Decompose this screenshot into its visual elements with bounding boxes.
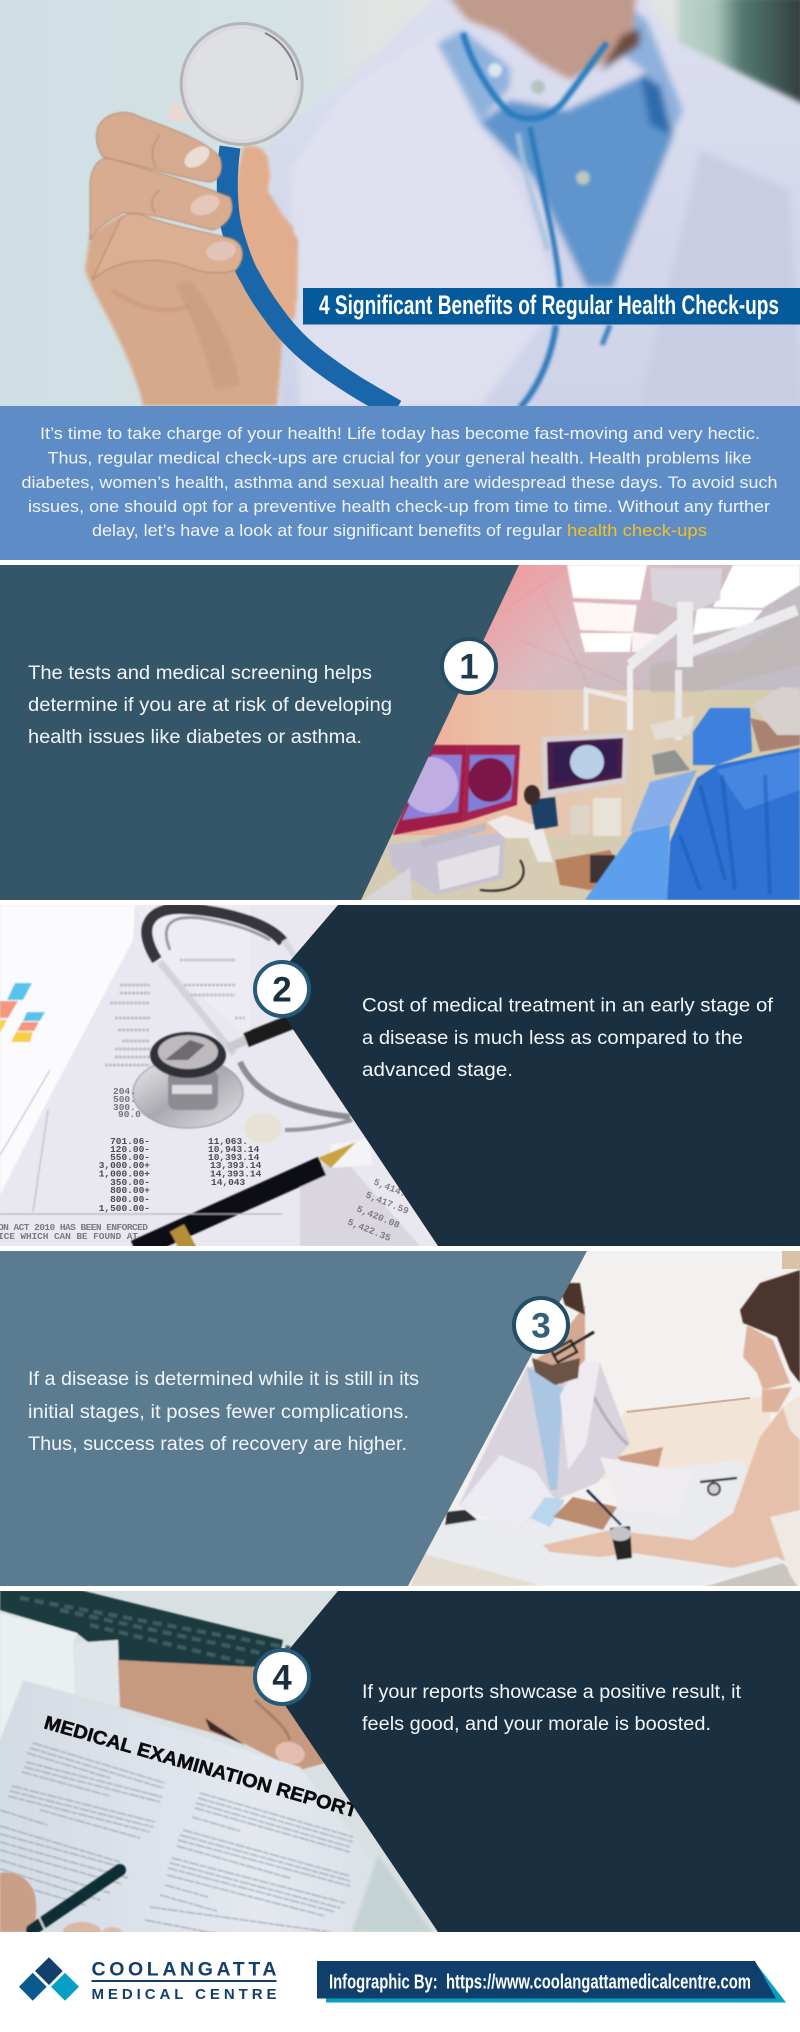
number badge 3: 3 [531,1306,551,1346]
ledger figures: 204. [113,1086,136,1097]
ledger figures: 120.00- [110,1144,150,1155]
intro text: Thus, regular medical check-ups are crucial for your general health. Health problems like [48,448,752,468]
benefit text 3: If a disease is determined while it is still in its [28,1369,419,1390]
ledger figures: 701.06- [110,1136,150,1147]
icon: stethoscope tube [227,147,396,410]
footer banner: infographic credit [317,1961,786,2002]
logo wordmark: COOLANGATTA [92,1958,276,1980]
intro text: diabetes, women’s health, asthma and sexual health are widespread these days. To avoid such [22,473,778,492]
number badge 3 [514,1298,568,1352]
ledger figures: 1,000.00+ [99,1168,150,1180]
intro text: health check-ups [567,521,707,540]
footer logo: Coolangatta Medical Centre: MEDICAL CENTRE [92,1986,276,2003]
footer logo: Coolangatta Medical Centre [19,1957,276,2003]
benefit text 2: a disease is much less as compared to the [362,1028,743,1049]
panel 2: cost of treatment [0,905,800,1252]
ledger figures: ON ACT 2010 HAS BEEN ENFORCED [0,1222,148,1233]
ledger figures: 5,420.08 [355,1204,402,1231]
panel 3: early detection [0,1251,800,1590]
benefit text 2: Cost of medical treatment in an early stage of [362,996,774,1016]
ledger figures: 11,063. [208,1136,248,1147]
panel 1: medical screening [0,565,800,900]
number badge 2 [255,962,309,1016]
benefit text 3: initial stages, it poses fewer complications. [28,1402,409,1423]
number badge 1: 1 [459,648,479,686]
ledger figures: 10,393.14 [208,1152,260,1163]
ledger figures: 3,000.00+ [99,1160,150,1171]
ledger figures: 800.00+ [110,1185,150,1196]
intro text: It’s time to take charge of your health! Life today has become fast-moving and very hectic. [40,424,760,443]
photo: doctor consulting with patient [400,1251,800,1590]
text panel shape [266,1591,800,1932]
benefit text 1: health issues like diabetes or asthma. [28,727,362,748]
ledger figures: 14,043 [211,1177,246,1188]
benefit text 3: Thus, success rates of recovery are higher. [28,1434,407,1455]
icon: logo diamonds [19,1957,79,2001]
photo: operating room [350,565,800,900]
ledger figures [0,1086,419,1244]
number badge 4 [255,1650,309,1704]
panel: introduction [0,406,800,560]
hero photo: doctor holding stethoscope [0,0,800,420]
benefit text 4: feels good, and your morale is boosted. [362,1714,711,1735]
benefit text 1: The tests and medical screening helps [28,663,372,684]
ledger figures: 90.0 [118,1109,141,1120]
writing hand and pen [0,1870,124,1945]
ledger figures: 13,393.14 [210,1160,262,1171]
icon: stethoscope disc [180,22,304,146]
report heading: MEDICAL EXAMINATION REPORT [42,1713,360,1823]
ledger figures: 300. [113,1102,136,1113]
benefit text 2: advanced stage. [362,1060,513,1081]
number badge 1 [442,639,496,693]
benefit text 1: determine if you are at risk of developing [28,695,392,716]
panel 4: morale boost [0,1590,800,1945]
ledger figures: 550.00- [110,1152,150,1163]
ledger figures: 5,422.35 [346,1217,393,1244]
ledger figures: 5,417.59 [364,1190,411,1217]
text panel shape [0,1251,587,1586]
ledger figures: 1,500.00- [99,1203,150,1214]
photo: stethoscope on financial papers [0,905,450,1252]
ledger figures: 10,943.14 [208,1144,260,1155]
photo: medical examination report [0,1590,450,1945]
icon: hand holding stethoscope [85,100,298,406]
icon: fingers [90,112,243,280]
ledger figures: 5,414.87 [372,1177,419,1204]
text panel shape [0,565,519,900]
intro text: delay, let’s have a look at four significant benefits of regular [92,521,562,540]
number badge 4: 4 [272,1658,292,1698]
intro text: issues, one should opt for a preventive health check-up from time to time. Without any further [28,497,770,516]
ledger figures: 800.00- [110,1194,150,1205]
ledger figures: ICE WHICH CAN BE FOUND AT [0,1231,138,1242]
ledger figures: 350.00- [110,1177,150,1188]
text panel shape [266,905,800,1246]
ledger figures: 500. [113,1094,136,1105]
ledger figures: 14,393.14 [210,1168,262,1180]
benefit text 4: If your reports showcase a positive result, it [362,1682,742,1703]
number badge 2: 2 [272,970,292,1010]
report body lines [0,1743,353,1940]
